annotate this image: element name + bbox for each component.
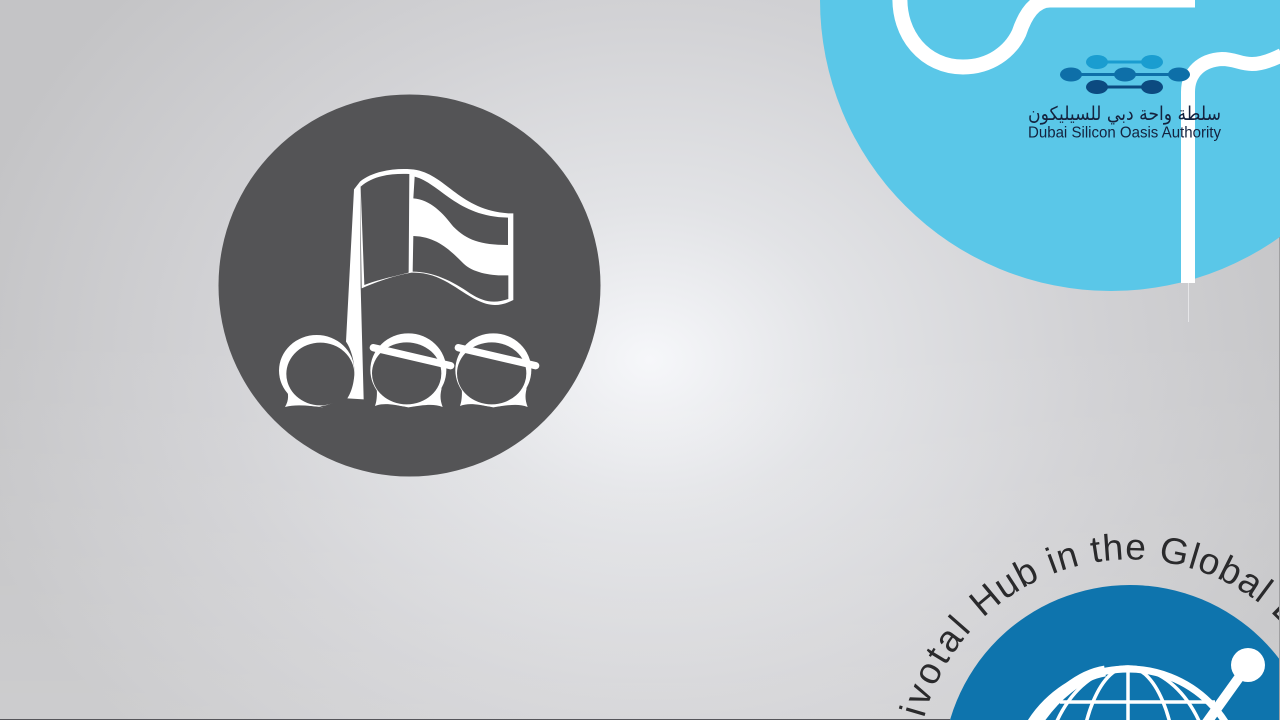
icon: globe xyxy=(1013,667,1243,720)
frame edge lines xyxy=(0,237,1280,720)
logo mark: connected ovals xyxy=(1060,55,1190,94)
white circuit track top xyxy=(900,0,1195,67)
faint line under track xyxy=(1188,283,1190,322)
logo: Dubai Silicon Oasis Authority xyxy=(1028,55,1221,142)
icon: doo flag logo xyxy=(279,169,536,407)
panel: blue globe circle xyxy=(942,585,1280,720)
white circuit track right xyxy=(1188,55,1280,283)
icon: antenna ball xyxy=(1205,648,1265,720)
panel: light blue corner circle xyxy=(820,0,1280,322)
English name: Dubai Silicon Oasis Authority xyxy=(1028,124,1221,142)
Arabic name: سلطة واحة دبي للسيليكون xyxy=(1028,103,1221,125)
panel: dark circle with flag logo xyxy=(218,94,600,476)
